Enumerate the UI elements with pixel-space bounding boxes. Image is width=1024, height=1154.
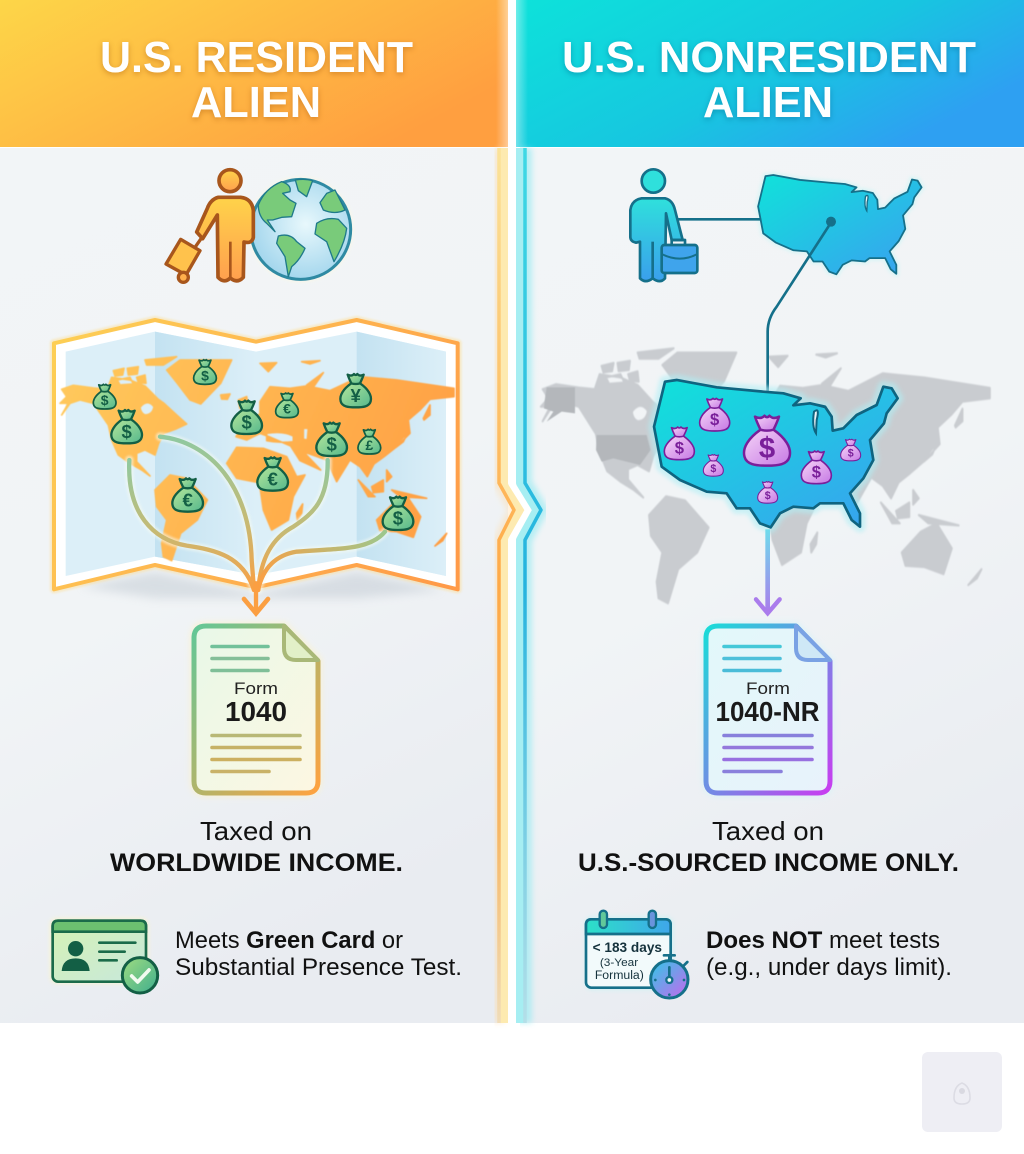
icon: calendar with stopwatch: Formula) — [595, 968, 644, 982]
icon: traveler — [197, 170, 253, 281]
icons: green money bags — [93, 360, 413, 530]
icon: person with briefcase — [630, 169, 697, 281]
chart: income flow arrows — [129, 437, 385, 613]
labels: currency symbols — [101, 367, 404, 529]
header: nonresident alien: ALIEN — [703, 78, 833, 127]
labels: currency symbols: $ — [201, 367, 209, 383]
text: meets green card or substantial presence test: Substantial Presence Test. — [175, 954, 462, 981]
icon: form 1040-NR: Form — [746, 680, 790, 698]
icon: green card with check — [50, 918, 158, 993]
labels: currency symbols: $ — [101, 392, 109, 408]
icon: form 1040: 1040 — [225, 696, 287, 727]
labels: currency symbols: ¥ — [350, 385, 361, 406]
icon: form 1040: Form — [234, 680, 278, 698]
icon: calendar with stopwatch: < 183 days — [593, 940, 662, 955]
arrow: U.S. income to form 1040-NR — [756, 529, 780, 613]
header: resident alien — [0, 0, 508, 147]
map: gray world map — [541, 348, 990, 603]
labels: currency symbols: $ — [393, 508, 404, 529]
text: taxed on U.S.-sourced income only: Taxed on — [712, 816, 824, 846]
map: folded world map — [54, 320, 458, 613]
labels: currency symbols: £ — [365, 437, 373, 453]
header: nonresident alien — [516, 0, 1024, 147]
icon: form 1040-NR — [706, 626, 830, 793]
icon: form 1040 — [194, 626, 318, 793]
text: taxed on worldwide income: WORLDWIDE INCOME. — [110, 849, 403, 877]
connector: person to U.S. to income map — [678, 219, 828, 392]
icons: purple money bags — [664, 398, 861, 503]
text: does not meet tests: (e.g., under days limit). — [706, 954, 952, 981]
icon: calendar with stopwatch — [585, 911, 688, 998]
icon: calendar with stopwatch: (3-Year — [600, 957, 638, 969]
text: does not meet tests: Does NOT meet tests — [706, 927, 940, 954]
text: meets green card or substantial presence test — [175, 927, 462, 981]
text: taxed on U.S.-sourced income only: U.S.-SOURCED INCOME ONLY. — [578, 849, 959, 877]
labels: dollar signs: $ — [710, 410, 720, 429]
map: continents — [60, 357, 454, 561]
icon: form 1040-NR: 1040-NR — [716, 696, 820, 727]
labels: dollar signs: $ — [759, 432, 775, 465]
watermark badge — [922, 1052, 1002, 1132]
icon: globe — [251, 179, 351, 279]
labels: currency symbols: $ — [326, 434, 337, 455]
icon: traveler with suitcase and globe — [166, 170, 353, 282]
labels: dollar signs: $ — [765, 490, 771, 502]
header: nonresident alien: U.S. NONRESIDENT — [562, 33, 976, 82]
labels: dollar signs: $ — [812, 463, 822, 482]
marker: U.S. location dot — [826, 217, 836, 227]
labels: currency symbols: $ — [241, 412, 252, 433]
icon: small U.S. map — [758, 175, 922, 274]
text: taxed on worldwide income: Taxed on — [200, 816, 312, 846]
text: does not meet tests — [706, 927, 952, 981]
labels: currency symbols: € — [267, 468, 278, 489]
header: resident alien: U.S. RESIDENT — [100, 33, 413, 82]
labels: currency symbols: € — [182, 489, 193, 510]
header: resident alien: ALIEN — [191, 78, 321, 127]
labels: dollar signs — [675, 410, 854, 502]
labels: currency symbols: $ — [121, 421, 132, 442]
map: darker U.S. on gray world — [544, 387, 651, 465]
text: taxed on worldwide income — [110, 816, 403, 877]
icon: suitcase — [166, 237, 202, 282]
labels: dollar signs: $ — [848, 448, 854, 460]
panel: nonresident alien — [516, 0, 1024, 1023]
map: large U.S. with income — [654, 380, 898, 527]
text: meets green card or substantial presence test: Meets Green Card or — [175, 927, 403, 954]
panel: resident alien — [0, 0, 508, 1023]
labels: dollar signs: $ — [710, 463, 716, 475]
text: taxed on U.S.-sourced income only — [578, 816, 959, 877]
divider: glowing chevron between panels — [499, 0, 541, 1023]
labels: dollar signs: $ — [675, 439, 685, 458]
labels: currency symbols: € — [283, 401, 291, 417]
